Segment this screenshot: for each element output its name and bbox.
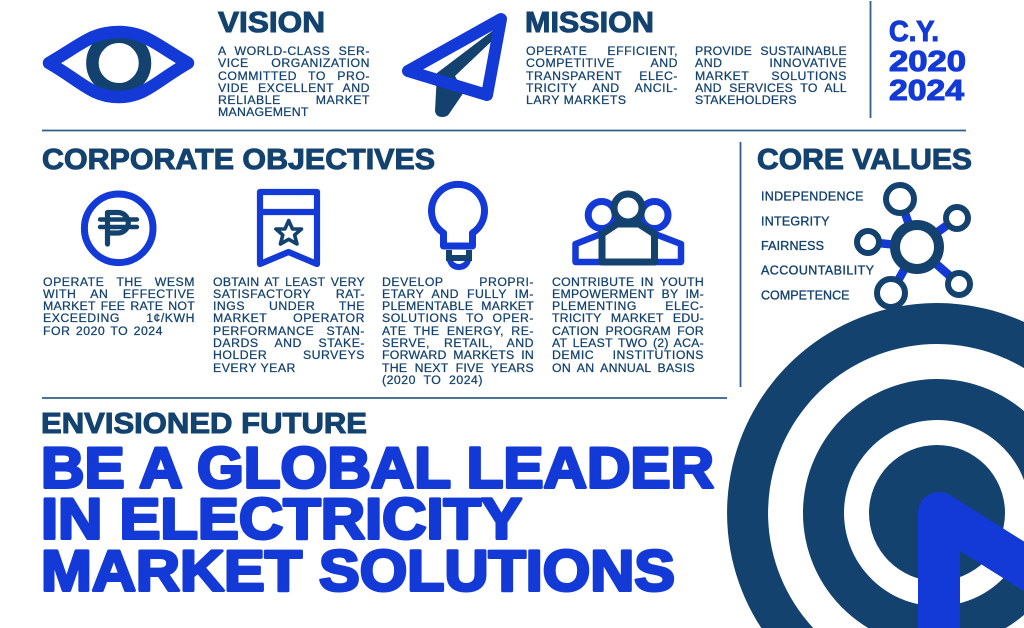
text: objective two: DARDS AND STAKE- bbox=[213, 336, 365, 350]
period label: 2024 bbox=[889, 75, 964, 107]
text: objective three: SERVE, RETAIL, AND bbox=[382, 336, 534, 350]
text: objective two: HOLDER SURVEYS bbox=[213, 348, 365, 362]
text: objective one: MARKET FEE RATE NOT bbox=[43, 299, 195, 313]
text: objective three: FORWARD MARKETS IN bbox=[382, 348, 534, 362]
text: objective three: (2020 TO 2024) bbox=[382, 373, 483, 387]
period label bbox=[889, 16, 966, 107]
text: objective three: THE NEXT FIVE YEARS bbox=[382, 361, 534, 375]
text: vision statement: A WORLD-CLASS SER- bbox=[218, 44, 370, 58]
text: mission column two: AND SERVICES TO ALL bbox=[695, 81, 847, 95]
core values list: INDEPENDENCE bbox=[761, 190, 864, 204]
period label: C.Y. bbox=[889, 16, 939, 48]
text: mission column one: TRICITY AND ANCIL- bbox=[526, 81, 678, 95]
text: objective two: INGS UNDER THE bbox=[213, 299, 365, 313]
heading: corporate objectives: CORPORATE OBJECTIVES bbox=[42, 144, 435, 176]
statement: be a global leader: BE A GLOBAL LEADER bbox=[41, 436, 714, 500]
core values list bbox=[761, 190, 875, 302]
heading: envisioned future: ENVISIONED FUTURE bbox=[41, 408, 367, 440]
text: objective one: WITH AN EFFECTIVE bbox=[43, 287, 195, 301]
text: objective two: PERFORMANCE STAN- bbox=[213, 324, 365, 338]
text: objective three: DEVELOP PROPRI- bbox=[382, 274, 534, 288]
text: objective three: ATE THE ENERGY, RE- bbox=[382, 324, 534, 338]
heading: vision: VISION bbox=[218, 7, 325, 39]
statement: be a global leader bbox=[41, 436, 714, 604]
text: objective four: CONTRIBUTE IN YOUTH bbox=[552, 274, 704, 288]
heading: core values: CORE VALUES bbox=[757, 144, 972, 176]
target with arrow bbox=[727, 303, 1024, 628]
text: objective two: OBTAIN AT LEAST VERY bbox=[213, 274, 365, 288]
text: mission column two: STAKEHOLDERS bbox=[695, 93, 797, 107]
text: mission column one: LARY MARKETS bbox=[526, 93, 627, 107]
text: vision statement bbox=[218, 44, 370, 119]
text: objective three: ETARY AND FULLY IM- bbox=[382, 287, 534, 301]
text: mission column two bbox=[694, 44, 847, 107]
text: mission column two: MARKET SOLUTIONS bbox=[695, 69, 847, 83]
text: mission column one bbox=[526, 44, 678, 107]
icon: people group bbox=[576, 194, 681, 262]
text: objective one bbox=[42, 274, 195, 338]
text: objective four: CATION PROGRAM FOR bbox=[552, 324, 704, 338]
text: mission column two: PROVIDE SUSTAINABLE bbox=[695, 44, 847, 58]
text: objective four: PLEMENTING ELEC- bbox=[552, 299, 704, 313]
icon: light bulb bbox=[432, 184, 484, 270]
text: objective one: OPERATE THE WESM bbox=[43, 274, 195, 288]
core values list: FAIRNESS bbox=[761, 239, 824, 253]
text: vision statement: VIDE EXCELLENT AND bbox=[218, 81, 370, 95]
icon: peso coin bbox=[84, 194, 153, 263]
text: objective two bbox=[213, 274, 365, 375]
text: vision statement: VICE ORGANIZATION bbox=[218, 56, 370, 70]
statement: be a global leader: IN ELECTRICITY bbox=[41, 488, 522, 552]
text: objective four: AT LEAST TWO (2) ACA- bbox=[552, 336, 704, 350]
period label: 2020 bbox=[889, 46, 966, 78]
icon: bookmark star bbox=[260, 192, 317, 264]
text: vision statement: COMMITTED TO PRO- bbox=[218, 69, 370, 83]
text: mission column one: OPERATE EFFICIENT, bbox=[526, 44, 678, 58]
heading: mission: MISSION bbox=[525, 7, 654, 39]
text: vision statement: MANAGEMENT bbox=[218, 105, 309, 119]
text: objective four: ON AN ANNUAL BASIS bbox=[552, 361, 695, 375]
text: objective one: EXCEEDING 1¢/KWH bbox=[43, 311, 195, 325]
text: mission column one: TRANSPARENT ELEC- bbox=[526, 69, 678, 83]
core values list: ACCOUNTABILITY bbox=[761, 264, 875, 278]
text: objective three bbox=[382, 274, 534, 387]
core values list: COMPETENCE bbox=[761, 288, 850, 302]
text: objective two: EVERY YEAR bbox=[213, 361, 296, 375]
text: objective two: SATISFACTORY RAT- bbox=[213, 287, 365, 301]
text: objective four: DEMIC INSTITUTIONS bbox=[552, 348, 704, 362]
text: objective one: FOR 2020 TO 2024 bbox=[43, 324, 163, 338]
text: mission column two: AND INNOVATIVE bbox=[695, 56, 847, 70]
icon: eye bbox=[49, 32, 188, 97]
icon: network hub bbox=[857, 185, 970, 307]
text: objective three: SOLUTIONS TO OPER- bbox=[382, 311, 534, 325]
text: mission column one: COMPETITIVE AND bbox=[526, 56, 678, 70]
statement: be a global leader: MARKET SOLUTIONS bbox=[41, 540, 675, 604]
text: objective two: MARKET OPERATOR bbox=[213, 311, 365, 325]
text: objective four: EMPOWERMENT BY IM- bbox=[552, 287, 704, 301]
core values list: INTEGRITY bbox=[761, 214, 830, 228]
icon: paper plane bbox=[408, 19, 501, 117]
text: vision statement: RELIABLE MARKET bbox=[218, 93, 370, 107]
text: objective four bbox=[552, 274, 704, 375]
text: objective four: TRICITY MARKET EDU- bbox=[552, 311, 704, 325]
text: objective three: PLEMENTABLE MARKET bbox=[382, 299, 534, 313]
